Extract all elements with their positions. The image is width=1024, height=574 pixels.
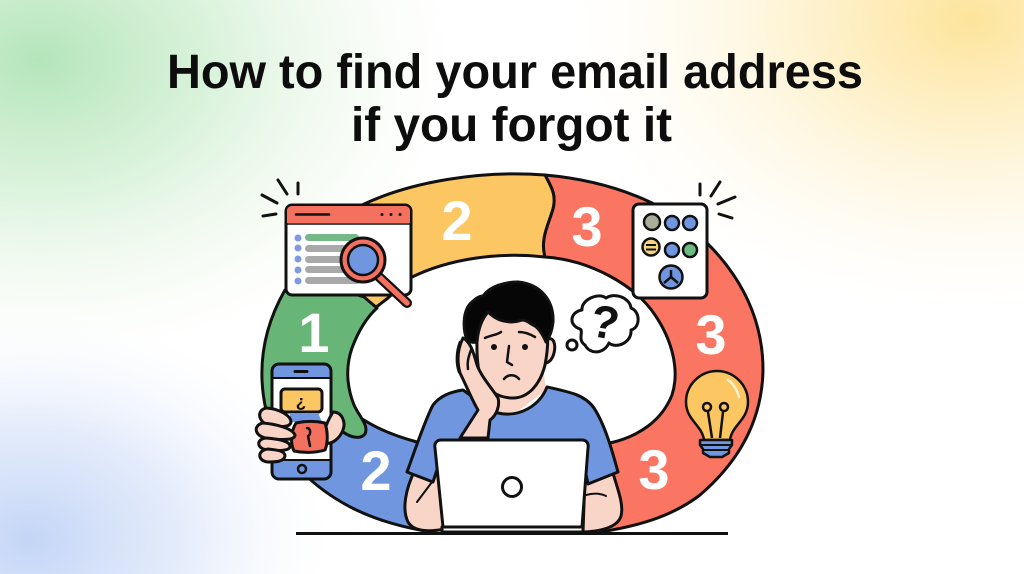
eyebrows and eyes bbox=[485, 332, 535, 338]
segment: yellow step 2 bbox=[360, 174, 554, 308]
step numbers: 3 bbox=[638, 438, 670, 501]
segment: blue step 2 bbox=[300, 400, 440, 531]
step numbers: 3 bbox=[571, 195, 603, 258]
thought bubble bbox=[567, 294, 638, 352]
title: if you forgot it bbox=[351, 99, 672, 152]
inner white blob bbox=[345, 256, 677, 446]
thought bubble: ? bbox=[587, 294, 623, 350]
step numbers: 2 bbox=[360, 439, 392, 502]
ring diagram bbox=[262, 174, 763, 532]
step numbers: 2 bbox=[441, 189, 473, 252]
laptop bbox=[435, 440, 588, 532]
icon: phone in hand bbox=[256, 364, 344, 479]
icon: app grid card bbox=[633, 182, 735, 298]
left arm bbox=[405, 470, 445, 531]
icon: phone in hand: ¿ bbox=[296, 392, 306, 411]
icon: light bulb bbox=[686, 371, 748, 457]
neck bbox=[490, 368, 546, 425]
step numbers: 3 bbox=[695, 303, 727, 366]
icon: browser window with magnifier bbox=[262, 180, 411, 303]
face bbox=[477, 305, 548, 398]
shirt bbox=[407, 387, 618, 484]
step numbers bbox=[298, 189, 727, 502]
hand on cheek bbox=[458, 338, 499, 438]
hair bbox=[464, 282, 553, 342]
nose and mouth bbox=[504, 346, 519, 379]
title: How to find your email address bbox=[167, 46, 863, 99]
thumb bbox=[324, 412, 344, 443]
segment: green step 1 bbox=[262, 280, 377, 440]
step numbers: 1 bbox=[298, 301, 330, 364]
right arm bbox=[583, 470, 622, 532]
segment: red step 3 lower right bbox=[543, 175, 763, 532]
title bbox=[167, 46, 863, 152]
fingers bbox=[260, 408, 291, 427]
ear bbox=[543, 339, 555, 363]
person bbox=[405, 282, 622, 532]
desk line bbox=[296, 532, 728, 535]
red card bbox=[292, 422, 327, 452]
